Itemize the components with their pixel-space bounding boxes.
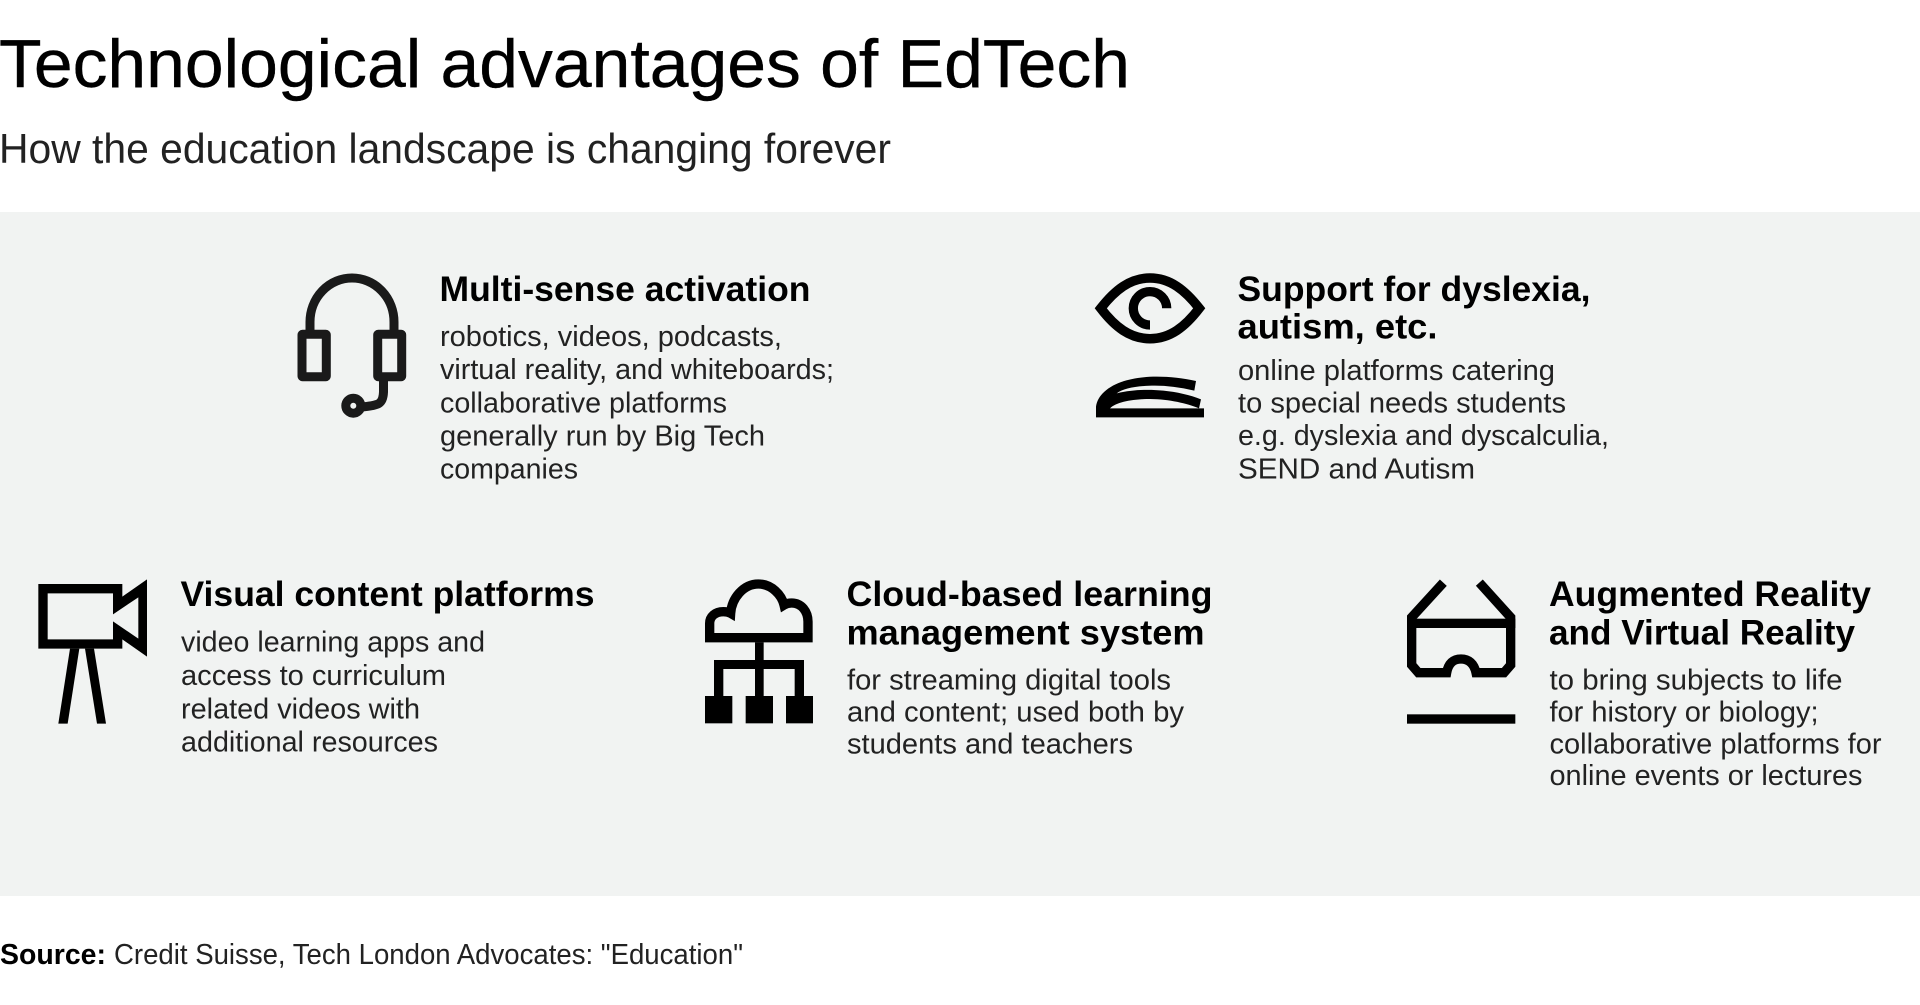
item: augmented and virtual reality [1407,575,1882,792]
body: augmented reality: to bring subjects to life [1550,664,1842,696]
body: multi-sense activation: generally run by Big Tech [440,420,765,452]
item: visual content platforms [38,575,595,759]
body: support for dyslexia: to special needs students [1238,388,1566,420]
source note: Credit Suisse, Tech London Advocates: "Education" [114,939,743,971]
body: cloud-based learning [847,664,1184,760]
heading: cloud-based learning: management system [846,614,1204,652]
title: Technological advantages of EdTech [0,26,1130,102]
body: support for dyslexia [1238,355,1609,485]
body: cloud-based learning: students and teachers [847,728,1133,760]
body: multi-sense activation [440,321,834,486]
body: augmented reality: online events or lectures [1550,760,1862,792]
icon: eye over book [1096,278,1204,417]
heading: cloud-based learning: Cloud-based learning [846,575,1212,614]
body: multi-sense activation: collaborative platforms [440,388,727,420]
subtitle: How the education landscape is changing forever [0,125,891,172]
body: visual content platforms: video learning apps and [181,627,485,659]
heading: augmented reality [1549,575,1872,652]
item: multi-sense activation [302,270,834,486]
heading: support for dyslexia: Support for dyslexia, [1238,270,1590,309]
body: visual content platforms: additional resources [181,727,438,759]
icon: video camera on tripod [38,579,147,724]
icon: headset [302,278,402,413]
body: support for dyslexia: e.g. dyslexia and dyscalculia, [1238,420,1609,452]
body: augmented reality: for history or biology; [1550,697,1818,729]
body: support for dyslexia: online platforms catering [1238,355,1555,387]
body: cloud-based learning: and content; used both by [847,697,1184,729]
heading: support for dyslexia: autism, etc. [1238,308,1438,346]
heading: support for dyslexia [1238,270,1590,346]
item: support for dyslexia, autism [1096,270,1609,485]
body: multi-sense activation: companies [440,454,578,486]
body: support for dyslexia: SEND and Autism [1238,453,1475,485]
body: visual content platforms: related videos with [181,693,420,725]
body: multi-sense activation: virtual reality, and whiteboards; [440,354,834,386]
heading: visual content platforms: Visual content platforms [180,575,594,614]
body: cloud-based learning: for streaming digital tools [847,664,1171,696]
body: augmented reality: collaborative platforms for [1550,728,1882,760]
source note: Source: [0,939,106,971]
icon: cloud network [705,584,813,723]
heading: multi-sense activation: Multi-sense activation [440,270,810,309]
body: multi-sense activation: robotics, videos, podcasts, [440,321,782,353]
item: cloud-based learning management [705,575,1212,760]
panel: background [0,212,1920,896]
heading: augmented reality: Augmented Reality [1549,575,1872,614]
body: augmented reality [1550,664,1882,792]
body: visual content platforms: access to curriculum [181,660,446,692]
heading: cloud-based learning [846,575,1212,652]
icon: VR goggles [1407,583,1515,724]
heading: augmented reality: and Virtual Reality [1549,614,1856,652]
body: visual content platforms [181,627,485,759]
